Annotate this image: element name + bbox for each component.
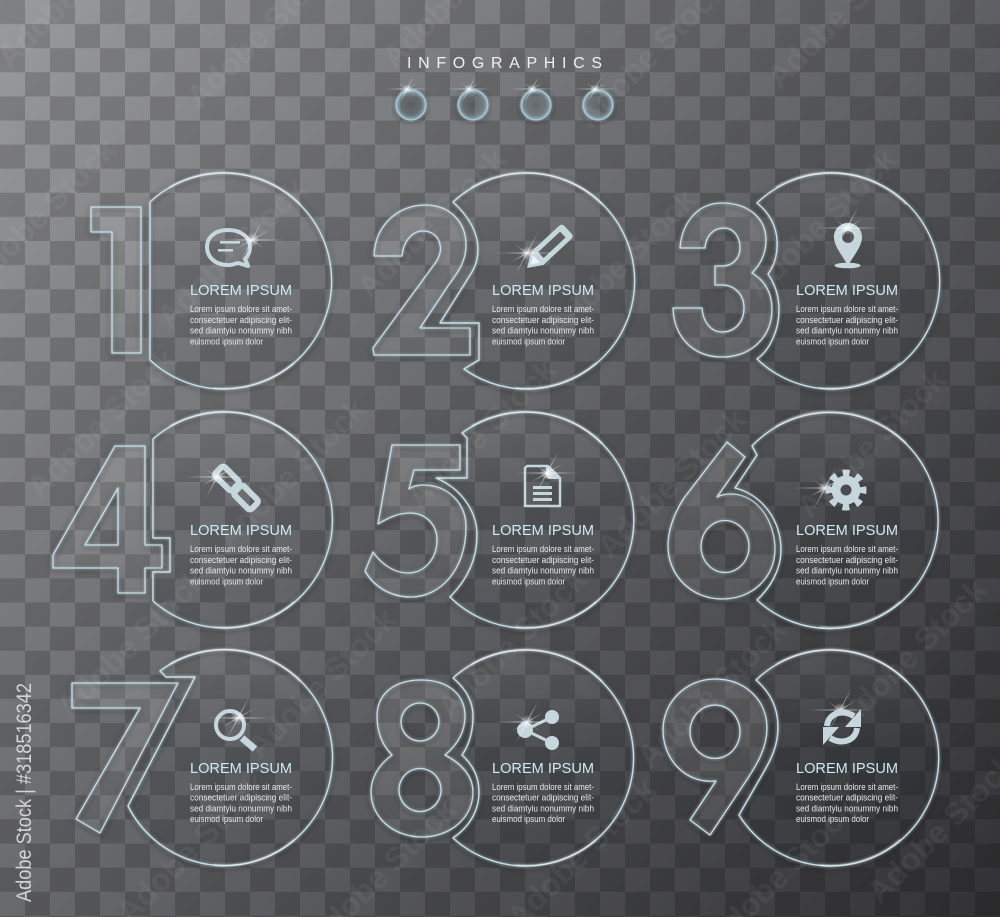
- body text: euismod ipsum dolor: [796, 576, 869, 586]
- faint diagonal watermark text: Adobe Stock: [349, 141, 513, 305]
- numeral 8: [371, 680, 473, 837]
- panel 9: [663, 650, 939, 866]
- body text: Lorem ipsum dolore sit amet-: [492, 544, 594, 554]
- faint diagonal watermark text: Adobe Stock: [49, 561, 213, 725]
- faint diagonal watermark text: Adobe Stock: [399, 351, 563, 515]
- body text: [796, 782, 898, 824]
- heading: LOREM IPSUM: [796, 760, 898, 777]
- faint diagonal watermark text: Adobe Stock: [239, 601, 403, 765]
- body text: Lorem ipsum dolore sit amet-: [796, 304, 898, 314]
- faint diagonal watermark text: Adobe Stock: [589, 401, 753, 565]
- body text: sed diamtyiu nonummy nibh: [492, 566, 594, 576]
- body text: [190, 544, 292, 586]
- body text: [190, 782, 292, 824]
- faint diagonal watermark text: Adobe Stock: [829, 571, 993, 735]
- panel 2: [373, 173, 635, 389]
- glass disc 5: [436, 412, 634, 628]
- numeral 3: [673, 203, 772, 357]
- body text: Lorem ipsum dolore sit amet-: [796, 782, 898, 792]
- numeral 1: [91, 207, 141, 353]
- body text: Lorem ipsum dolore sit amet-: [190, 544, 292, 554]
- glass disc 4: [153, 412, 332, 628]
- body text: consectetuer adipiscing elit-: [492, 315, 594, 325]
- numeral 9: [663, 679, 767, 835]
- numeral 6: [668, 442, 775, 599]
- body text: consectetuer adipiscing elit-: [190, 555, 292, 565]
- body text: consectetuer adipiscing elit-: [190, 793, 292, 803]
- icon: pencil: [495, 223, 574, 275]
- glass disc 2: [440, 173, 635, 389]
- body text: [492, 304, 594, 346]
- panel 4: [53, 412, 332, 628]
- body text: sed diamtyiu nonummy nibh: [796, 566, 898, 576]
- numeral 5: [365, 445, 466, 597]
- numeral 4: [53, 446, 162, 593]
- heading: LOREM IPSUM: [492, 282, 594, 299]
- body text: sed diamtyiu nonummy nibh: [190, 804, 292, 814]
- glass disc 9: [739, 650, 939, 866]
- glass disc 3: [757, 173, 940, 389]
- heading: LOREM IPSUM: [796, 282, 898, 299]
- heading: LOREM IPSUM: [796, 522, 898, 539]
- icon: document: [515, 451, 579, 506]
- panel 3: [673, 173, 940, 389]
- faint diagonal watermark text: Adobe Stock: [739, 141, 903, 305]
- body text: consectetuer adipiscing elit-: [492, 555, 594, 565]
- body text: sed diamtyiu nonummy nibh: [492, 804, 594, 814]
- body text: euismod ipsum dolor: [190, 336, 263, 346]
- body text: euismod ipsum dolor: [492, 576, 565, 586]
- glass disc 7: [128, 650, 333, 866]
- icon: gear: [793, 466, 863, 510]
- decorative glass dots: [385, 76, 617, 120]
- body text: sed diamtyiu nonummy nibh: [796, 804, 898, 814]
- body text: euismod ipsum dolor: [190, 814, 263, 824]
- body text: Lorem ipsum dolore sit amet-: [492, 782, 594, 792]
- body text: euismod ipsum dolor: [492, 814, 565, 824]
- faint diagonal watermark text: Adobe Stock: [429, 561, 593, 725]
- body text: [492, 544, 594, 586]
- heading: LOREM IPSUM: [492, 522, 594, 539]
- body text: consectetuer adipiscing elit-: [796, 555, 898, 565]
- heading: LOREM IPSUM: [190, 760, 292, 777]
- faint diagonal watermark text: Adobe Stock: [539, 181, 703, 345]
- icon: map pin: [815, 206, 879, 268]
- body text: Lorem ipsum dolore sit amet-: [492, 304, 594, 314]
- faint diagonal watermark text: Adobe Stock: [629, 611, 793, 775]
- heading: LOREM IPSUM: [190, 522, 292, 539]
- panel 7: [72, 650, 333, 866]
- heading: LOREM IPSUM: [492, 760, 594, 777]
- body text: sed diamtyiu nonummy nibh: [190, 566, 292, 576]
- body text: sed diamtyiu nonummy nibh: [492, 326, 594, 336]
- body text: euismod ipsum dolor: [796, 336, 869, 346]
- body text: consectetuer adipiscing elit-: [796, 793, 898, 803]
- body text: Lorem ipsum dolore sit amet-: [190, 782, 292, 792]
- numeral 2: [373, 205, 470, 355]
- body text: [190, 304, 292, 346]
- body text: sed diamtyiu nonummy nibh: [796, 326, 898, 336]
- body text: [796, 304, 898, 346]
- body text: euismod ipsum dolor: [190, 576, 263, 586]
- icon: refresh: [808, 688, 872, 745]
- title: INFOGRAPHICS: [407, 55, 602, 72]
- faint diagonal watermark text: Adobe Stock: [789, 361, 953, 525]
- glass disc 6: [735, 413, 938, 629]
- numeral 7: [72, 683, 178, 833]
- icon: speech bubble: [207, 218, 284, 266]
- panel 6: [668, 412, 938, 629]
- faint diagonal watermark text: Adobe Stock: [209, 391, 373, 555]
- body text: euismod ipsum dolor: [796, 814, 869, 824]
- body text: [796, 544, 898, 586]
- body text: Lorem ipsum dolore sit amet-: [190, 304, 292, 314]
- body text: consectetuer adipiscing elit-: [492, 793, 594, 803]
- body text: sed diamtyiu nonummy nibh: [190, 326, 292, 336]
- icon: magnifier: [206, 696, 270, 749]
- glass disc 8: [453, 650, 634, 866]
- glass disc 1: [150, 173, 332, 389]
- faint diagonal watermark text: Adobe Stock: [149, 171, 313, 335]
- icon: share: [495, 700, 559, 750]
- body text: [492, 782, 594, 824]
- panel 1: [91, 173, 332, 389]
- body text: Lorem ipsum dolore sit amet-: [796, 544, 898, 554]
- body text: consectetuer adipiscing elit-: [796, 315, 898, 325]
- vertical stock id label: Adobe Stock | #318516342: [13, 683, 36, 902]
- faint diagonal watermark text: Adobe Stock: [19, 341, 183, 505]
- panel 8: [371, 650, 634, 866]
- body text: consectetuer adipiscing elit-: [190, 315, 292, 325]
- heading: LOREM IPSUM: [190, 282, 292, 299]
- panel 5: [365, 412, 634, 628]
- body text: euismod ipsum dolor: [492, 336, 565, 346]
- icon: chain link: [185, 455, 259, 511]
